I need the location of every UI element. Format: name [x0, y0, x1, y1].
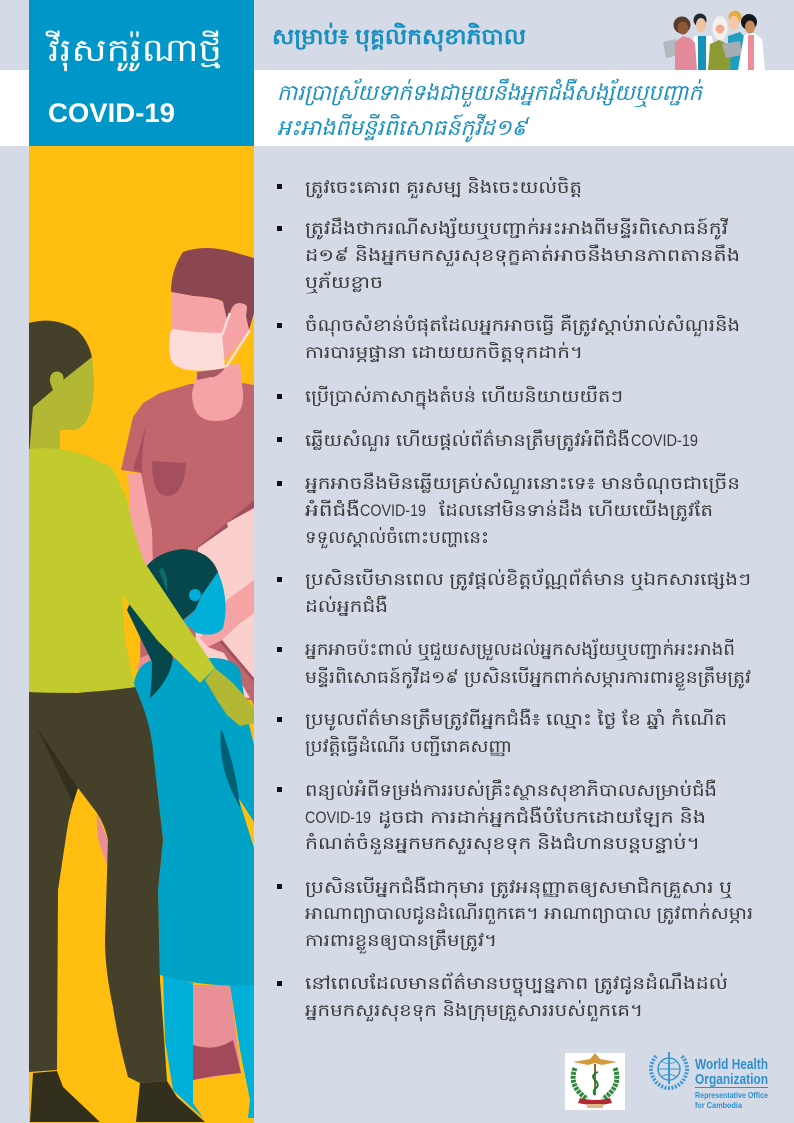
woman [29, 321, 254, 1122]
logo: WHO emblem [651, 1052, 687, 1088]
bullet 6: អ្នកអាចនឹងមិនឆ្លើយគ្រប់សំណួរនោះទេ៖ មានចំណុចជាច្រើន [305, 472, 740, 495]
bullet 6 [277, 472, 740, 549]
bullet 7: ដល់អ្នកជំងឺ [305, 595, 388, 617]
bullet 4: ប្រើប្រាស់ភាសាក្នុងតំបន់ ហើយនិយាយយឺតៗ [305, 385, 623, 410]
bullet 7 [277, 568, 751, 617]
bullet 9: ប្រវត្តិធ្វើដំណើរ បញ្ជីរោគសញ្ញា [305, 735, 512, 757]
bullet 3: ចំណុចសំខាន់បំផុតដែលអ្នកអាចធ្វើ គឺត្រូវស្តាប់រាល់សំណួរនិង [305, 314, 740, 337]
bullet 12 [277, 972, 728, 1022]
bullet 6: ដែលនៅមិនទាន់ដឹង ហើយយើងត្រូវតែ [439, 499, 713, 522]
bullet 2: ដ១៩ និងអ្នកមកសួរសុខទុក្ខគាត់អាចនឹងមានភាពតានតឹង [305, 244, 740, 267]
bullet 1 [277, 176, 582, 199]
bullet 11: ប្រសិនបើអ្នកជំងឺជាកុមារ ត្រូវអនុញ្ញាតឲ្យសមាជិកគ្រួសារ ឬ [305, 876, 732, 899]
subtitle: ការប្រាស្រ័យទាក់ទងជាមួយនឹងអ្នកជំងឺសង្ស័យឬបញ្ជាក់ [277, 78, 704, 108]
WHO wordmark: Organization [695, 1071, 768, 1088]
WHO wordmark: Representative Office [695, 1090, 768, 1100]
bullet 9: ប្រមូលព័ត៌មានត្រឹមត្រូវពីអ្នកជំងឺ៖ ឈ្មោះ ថ្ងៃ ខែ ឆ្នាំ កំណើត [305, 708, 727, 731]
bullet 4 [277, 385, 623, 410]
WHO wordmark [695, 1056, 768, 1110]
bullet 3: ការបារម្ភផ្ទានា ដោយយកចិត្តទុកដាក់។ [305, 341, 583, 364]
illustration: three people in masks on yellow [29, 146, 254, 1123]
child [127, 549, 254, 1118]
bullet 7: ប្រសិនបើមានពេល ត្រូវផ្តល់ខិត្តប័ណ្ណព័ត៌មាន ឬឯកសារផ្សេងៗ [305, 568, 751, 591]
bullet 6: អំពីជំងឺ [305, 499, 360, 520]
bullet 11 [277, 876, 753, 954]
bullet 2: ឬភ័យខ្លាច [305, 271, 383, 294]
title: COVID-19: COVID-19 [48, 98, 175, 128]
bullet 10: COVID-19 [305, 808, 371, 827]
title panel [29, 0, 254, 146]
bullet 2 [277, 217, 740, 294]
bullet 5: COVID-19 [631, 431, 698, 450]
bullet 11: ការពារខ្លួនឲ្យបានត្រឹមត្រូវ។ [305, 929, 497, 954]
bullet 12: អ្នកមកសួរសុខទុក និងក្រុមគ្រួសាររបស់ពួកគេ។ [305, 999, 643, 1022]
bullet 3 [277, 314, 740, 364]
bullet 5 [277, 429, 698, 452]
bullet 12: នៅពេលដែលមានព័ត៌មានបច្ចុប្បន្នភាព ត្រូវជូនដំណឹងដល់ [305, 972, 728, 997]
bullet 8: អ្នកអាចប៉ះពាល់ ឬជួយសម្រួលដល់អ្នកសង្ស័យឬបញ្ជាក់អះអាងពី [305, 638, 735, 661]
heading: audience: សម្រាប់៖ បុគ្គលិកសុខាភិបាល [272, 22, 526, 52]
bullet 5: ឆ្លើយសំណួរ ហើយផ្តល់ព័ត៌មានត្រឹមត្រូវអំពីជំងឺ [305, 429, 630, 452]
bullet 6: COVID-19 [360, 501, 426, 520]
icon: health workers group [663, 10, 765, 70]
logo: Ministry of Health Cambodia [565, 1053, 625, 1110]
WHO wordmark: for Cambodia [695, 1100, 742, 1110]
subtitle: អះអាងពីមន្ទីរពិសោធន៍កូវីដ១៩ [277, 114, 530, 142]
bullet 6: ទទួលស្គាល់ចំពោះបញ្ហានេះ [305, 526, 489, 549]
bullet 2: ត្រូវដឹងថាករណីសង្ស័យឬបញ្ជាក់អះអាងពីមន្ទីរពិសោធន៍កូវី [305, 217, 728, 240]
bullet 8: មន្ទីរពិសោធន៍កូវីដ១៩ ប្រសិនបើអ្នកពាក់សម្ភារការពារខ្លួនត្រឹមត្រូវ [305, 666, 751, 691]
subtitle [277, 78, 704, 142]
bullet 11: អាណាព្យាបាលជូនដំណើរពួកគេ។ អាណាព្យាបាល ត្រូវពាក់សម្ភារ [305, 902, 753, 925]
white subtitle band [0, 70, 794, 146]
bullet 10 [277, 779, 717, 855]
bullet 8 [277, 638, 751, 691]
bullet 10: ពន្យល់អំពីទម្រង់ការរបស់គ្រឹះស្ថានសុខាភិបាលសម្រាប់ជំងឺ [305, 779, 717, 802]
bullet 1: ត្រូវចេះគោរព គួរសម្ប និងចេះយល់ចិត្ត [305, 176, 582, 199]
WHO wordmark: World Health [695, 1056, 768, 1073]
title: novel coronavirus: វីរុសកូរ៉ូណាថ្មី [45, 30, 222, 72]
bullet 10: កំណត់ចំនួនអ្នកមកសួរសុខទុក និងជំហានបន្តបន្ទាប់។ [305, 832, 700, 855]
bullet 9 [277, 708, 727, 757]
man [97, 248, 254, 1080]
bullet 10: ដូចជា ការដាក់អ្នកជំងឺបំបែកដោយឡែក និង [378, 806, 706, 829]
